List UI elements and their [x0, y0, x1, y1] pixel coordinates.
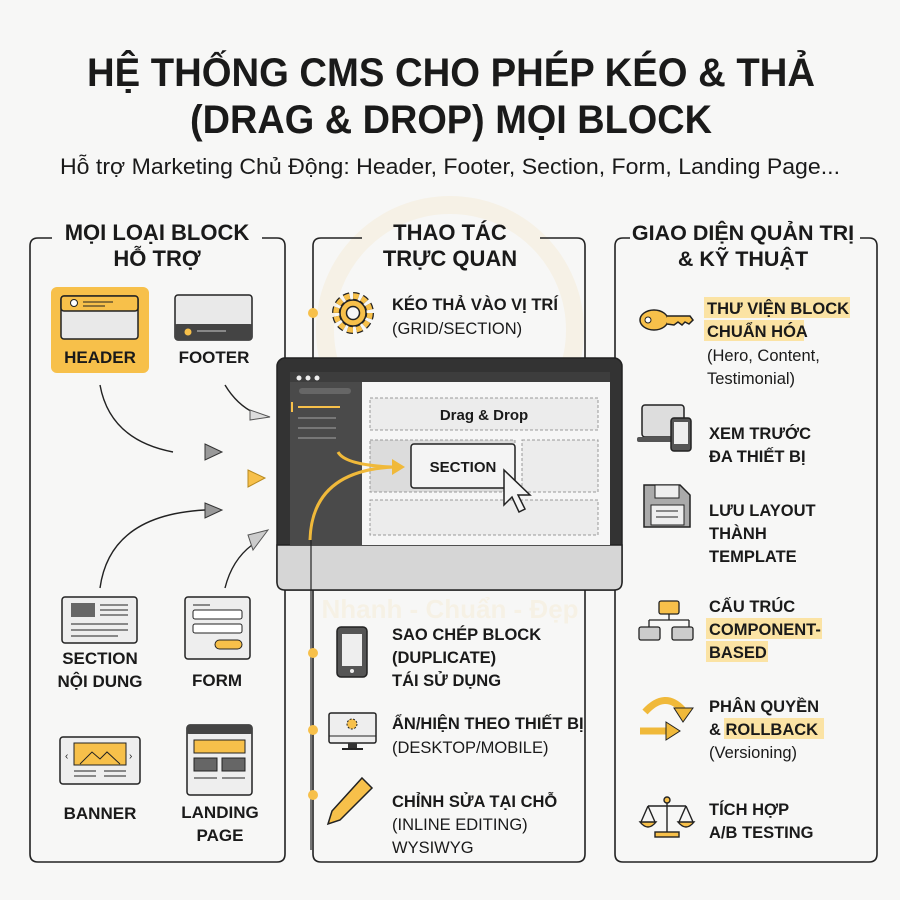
subtitle: Hỗ trợ Marketing Chủ Động: Header, Footer, Section, Form, Landing Page...	[60, 154, 840, 179]
icon: form	[185, 597, 250, 690]
item: drag into position: (GRID/SECTION)	[392, 320, 522, 338]
item: duplicate: SAO CHÉP BLOCK	[392, 625, 541, 644]
title: HỆ THỐNG CMS CHO PHÉP KÉO & THẢ	[87, 49, 815, 95]
icon: section noi dung: NỘI DUNG	[58, 672, 142, 691]
item: rollback: (Versioning)	[709, 744, 797, 762]
item: show hide: (DESKTOP/MOBILE)	[392, 739, 548, 757]
heading: left: MỌI LOẠI BLOCK	[65, 220, 249, 245]
item: rollback	[640, 697, 824, 762]
icon: banner: ›	[129, 751, 132, 762]
arrows into monitor	[100, 385, 270, 588]
item: component based: COMPONENT-	[709, 621, 821, 639]
watermark	[285, 205, 615, 624]
panel: right admin & technical	[615, 220, 877, 862]
item: duplicate: (DUPLICATE)	[392, 649, 496, 667]
item: save template	[644, 485, 816, 566]
item: show hide	[308, 713, 584, 757]
item: component based: CẤU TRÚC	[709, 597, 795, 616]
heading: left	[65, 220, 249, 271]
panel: middle visual operations	[277, 220, 622, 862]
item: component based	[639, 597, 822, 662]
item: rollback: PHÂN QUYỀN	[709, 697, 819, 716]
heading: left: HỖ TRỢ	[113, 245, 201, 271]
item: duplicate: TÁI SỬ DỤNG	[392, 671, 501, 690]
icon: banner	[60, 737, 140, 823]
icon: footer block	[175, 295, 252, 367]
heading: right	[632, 220, 854, 271]
item: inline editing	[308, 778, 557, 857]
item: block library	[640, 297, 850, 388]
icon: landing page	[181, 725, 259, 845]
watermark: Nhanh - Chuẩn - Đẹp	[321, 594, 579, 624]
item: multi device preview: XEM TRƯỚC	[709, 424, 811, 443]
icon: landing page: PAGE	[197, 826, 243, 845]
item: multi device preview: ĐA THIẾT BỊ	[709, 447, 806, 466]
icon: header block: HEADER	[64, 348, 136, 367]
title: (DRAG & DROP) MỌI BLOCK	[190, 98, 712, 142]
item: inline editing: (INLINE EDITING)	[392, 816, 528, 834]
item: block library: (Hero, Content,	[707, 347, 820, 365]
monitor: Drag & Drop	[440, 407, 528, 424]
item: block library: THƯ VIỆN BLOCK	[707, 299, 849, 318]
item: save template: LƯU LAYOUT	[709, 502, 816, 520]
item: duplicate	[308, 625, 541, 690]
item: save template: TEMPLATE	[709, 548, 797, 566]
icon: form: FORM	[192, 671, 242, 690]
heading: right: GIAO DIỆN QUẢN TRỊ	[632, 220, 854, 245]
icon: section noi dung: SECTION	[62, 649, 138, 668]
item: rollback: & ROLLBACK	[709, 721, 818, 739]
item: multi device preview	[637, 405, 811, 466]
item: block library: Testimonial)	[707, 370, 795, 388]
icon: banner: BANNER	[64, 804, 136, 823]
icon: footer block: FOOTER	[179, 348, 249, 367]
icon: header block	[51, 287, 149, 373]
item: save template: THÀNH	[709, 524, 767, 543]
heading: middle: TRỰC QUAN	[383, 246, 517, 271]
item: show hide: ẨN/HIỆN THEO THIẾT BỊ	[392, 714, 584, 733]
icon: banner: ‹	[65, 751, 68, 762]
icon: landing page: LANDING	[181, 803, 259, 822]
icon: section noi dung	[58, 597, 142, 691]
heading: right: & KỸ THUẬT	[678, 246, 808, 271]
panel: left block types	[30, 220, 285, 862]
item: block library: CHUẨN HÓA	[707, 322, 808, 341]
title	[87, 49, 815, 142]
item: drag into position: KÉO THẢ VÀO VỊ TRÍ	[392, 295, 558, 314]
item: inline editing: WYSIWYG	[392, 839, 474, 857]
panel: right admin & technical: TÍCH HỢP	[709, 800, 789, 819]
item: component based: BASED	[709, 644, 767, 662]
monitor	[277, 358, 622, 590]
watermark: LIGHT	[285, 481, 615, 604]
heading: middle: THAO TÁC	[393, 220, 507, 245]
panel: right admin & technical: A/B TESTING	[709, 824, 814, 842]
item: drag into position	[308, 295, 558, 338]
item: ab testing	[640, 797, 694, 837]
item: inline editing: CHỈNH SỬA TẠI CHỖ	[392, 792, 557, 811]
heading: middle	[383, 220, 517, 271]
monitor: SECTION	[430, 459, 496, 476]
